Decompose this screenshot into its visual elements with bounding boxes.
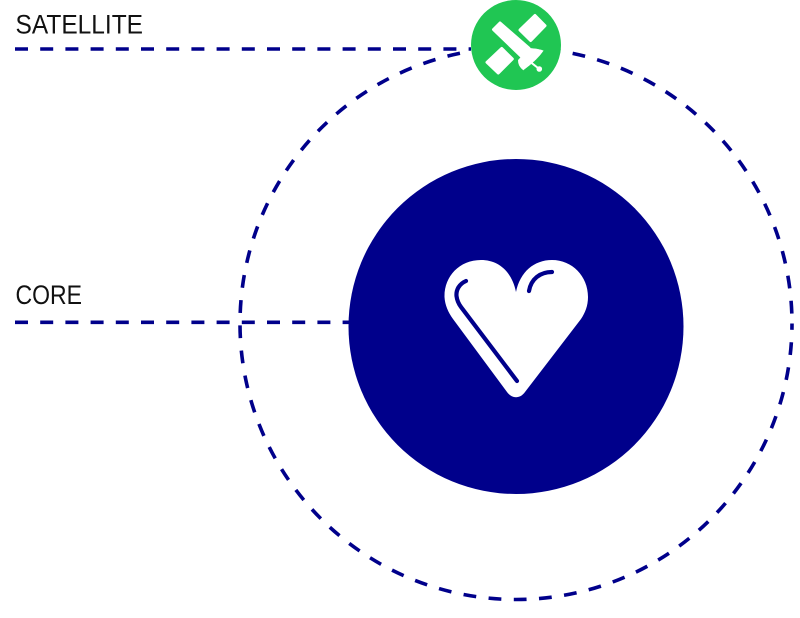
leader line: core	[15, 320, 350, 324]
label: satellite: SATELLITE	[16, 9, 143, 39]
label: core: CORE	[16, 280, 82, 310]
icon: satellite	[487, 16, 545, 73]
leader line: satellite	[15, 47, 471, 51]
satellite circle with icon	[471, 0, 561, 90]
core circle with heart icon	[348, 159, 684, 494]
icon: heart	[444, 260, 588, 397]
orbit: dashed circle	[240, 48, 792, 600]
